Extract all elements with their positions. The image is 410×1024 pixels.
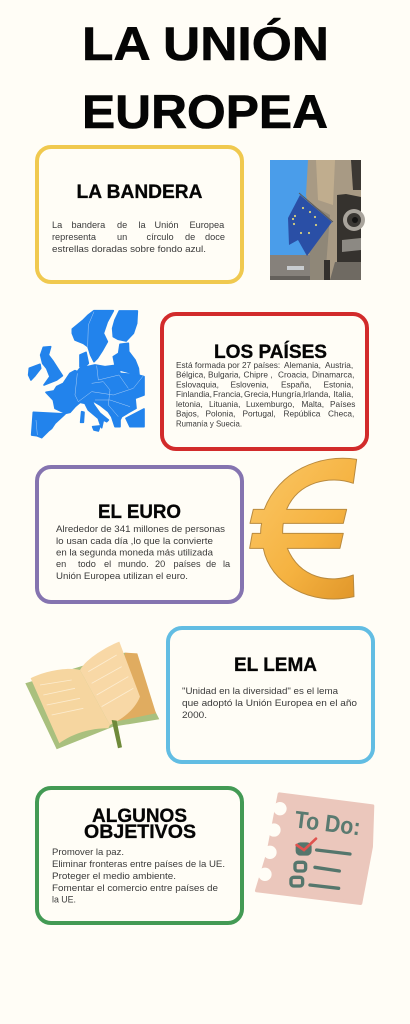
text: los países	[176, 360, 355, 428]
text: la bandera	[52, 220, 225, 254]
text: el euro	[56, 524, 231, 581]
illustration: open book	[25, 642, 159, 749]
text: los países: Países	[330, 399, 355, 409]
text: los países: Austria,	[325, 360, 353, 370]
text: los países: Bajos,	[176, 409, 199, 419]
text: el euro: lo usan cada día ,lo que la convierte	[56, 536, 213, 546]
text: la bandera: la	[138, 220, 147, 230]
text: los países: Alemania,	[284, 360, 321, 370]
text: los países: Portugal,	[242, 409, 276, 419]
text: los países: Hungría,	[272, 389, 303, 399]
text: algunos objetivos: Proteger el medio ambiente.	[52, 871, 176, 881]
text: los países: República	[284, 409, 321, 419]
text: algunos objetivos: la UE.	[52, 894, 76, 904]
text: los países: Grecia,	[244, 389, 271, 399]
text: algunos objetivos: Promover la paz.	[52, 847, 124, 857]
text: el euro: en la segunda moneda más utilizada	[56, 548, 214, 558]
text: los países: Luxemburgo,	[246, 399, 294, 409]
text: la bandera: círculo	[146, 232, 174, 242]
text: el euro: de	[206, 559, 216, 569]
text: los países: Está formada por 27 países:	[176, 360, 280, 370]
text: el lema: "Unidad en la diversidad" es el lema	[182, 686, 339, 696]
text: algunos objetivos	[52, 847, 225, 904]
heading: el euro: EL EURO	[98, 502, 181, 523]
title	[82, 17, 329, 138]
text: la bandera: doce	[205, 232, 225, 242]
text: los países: Finlandia,	[176, 389, 212, 399]
text: la bandera: de	[185, 232, 195, 242]
text: la bandera: representa	[52, 232, 97, 242]
heading: algunos objetivos: OBJETIVOS	[84, 822, 196, 843]
text: los países: España,	[281, 380, 311, 390]
title: EUROPEA	[82, 85, 328, 138]
text: los países: Dinamarca,	[312, 370, 354, 380]
text: la bandera: bandera	[72, 220, 106, 230]
text: algunos objetivos: Eliminar fronteras entre países de la UE.	[52, 859, 225, 869]
text: la bandera: de	[117, 220, 127, 230]
text: el lema	[182, 686, 357, 720]
to do label: To Do:	[293, 806, 362, 841]
text: el euro: el	[104, 559, 111, 569]
text: los países: Malta,	[302, 399, 324, 409]
panel: el lema	[168, 628, 373, 762]
text: el euro: en	[56, 559, 66, 569]
heading: los países: LOS PAÍSES	[214, 341, 327, 363]
title: LA UNIÓN	[82, 17, 329, 70]
illustration: to-do note	[257, 794, 373, 903]
panel: algunos objetivos	[37, 788, 242, 923]
panel: los países	[162, 314, 367, 449]
text: los países: Rumanía y Suecia.	[176, 418, 242, 428]
text: la bandera: La	[52, 220, 63, 230]
text: el euro: Unión Europea utilizan el euro.	[56, 571, 188, 581]
heading: el lema: EL LEMA	[234, 655, 317, 676]
text: los países: Lituania,	[209, 399, 240, 409]
text: los países: Eslovenia,	[230, 380, 269, 390]
text: los países: Croacia,	[278, 370, 309, 380]
text: los países: Checa,	[328, 409, 354, 419]
heading: algunos objetivos	[84, 806, 196, 843]
text: el lema: que adoptó la Unión Europea en el año	[182, 698, 357, 708]
panel: la bandera	[37, 147, 242, 282]
text: el euro: Alrededor de 341 millones de personas	[56, 524, 225, 534]
icon: euro symbol	[250, 458, 357, 599]
text: el lema: 2000.	[182, 710, 207, 720]
text: los países: letonia,	[176, 399, 203, 409]
heading: la bandera: LA BANDERA	[76, 182, 203, 203]
text: el euro: países	[174, 559, 201, 569]
text: los países: Italia,	[334, 389, 353, 399]
text: los países: Bélgica,	[176, 370, 206, 380]
photo: EU flag on building	[270, 160, 365, 280]
text: los países: Bulgaria,	[208, 370, 241, 380]
text: los países: Polonia,	[206, 409, 235, 419]
text: la bandera: Unión	[154, 220, 179, 230]
text: la bandera: Europea	[190, 220, 225, 230]
map of Europe	[29, 311, 144, 438]
text: la bandera: estrellas doradas sobre fondo azul.	[52, 244, 206, 254]
text: algunos objetivos: Fomentar el comercio entre países de	[52, 883, 218, 893]
panel: el euro	[37, 467, 242, 602]
text: los países: Francia,	[213, 389, 243, 399]
text: los países: Irlanda,	[303, 389, 331, 399]
text: el euro: mundo.	[118, 559, 149, 569]
text: el euro: la	[223, 559, 231, 569]
text: el euro: todo	[78, 559, 96, 569]
text: la bandera: un	[117, 232, 127, 242]
text: el euro: 20	[155, 559, 165, 569]
heading: algunos objetivos: ALGUNOS	[92, 806, 187, 827]
text: los países: Chipre ,	[244, 370, 273, 380]
text: los países: Estonia,	[324, 380, 353, 390]
text: los países: Eslovaquia,	[176, 380, 219, 390]
